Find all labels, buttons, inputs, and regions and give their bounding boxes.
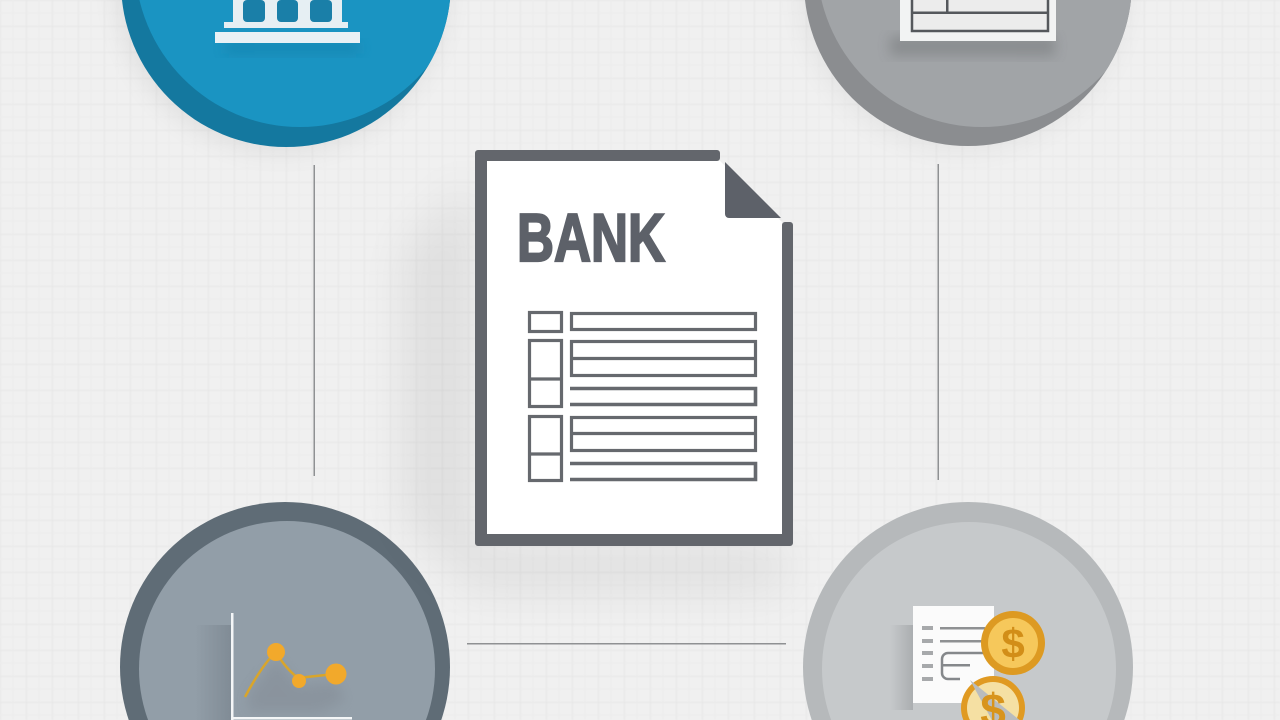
connector: left vertical line bbox=[314, 165, 315, 476]
coin: upper bbox=[981, 611, 1045, 675]
panel: bank statement document bbox=[405, 150, 793, 590]
icon: invoice with coins bbox=[890, 606, 1045, 720]
coin: lower bbox=[961, 676, 1025, 720]
connector: right vertical line bbox=[938, 164, 939, 480]
coin: upper: $ bbox=[1001, 620, 1025, 667]
table form bbox=[530, 312, 756, 480]
icon: line chart bbox=[211, 613, 352, 720]
document shadow bbox=[405, 175, 793, 590]
panel: blue bank circle bbox=[117, 0, 465, 151]
icon: form document bbox=[900, 0, 1056, 41]
icon: folded corner bbox=[725, 162, 781, 218]
connector: bottom horizontal line bbox=[467, 643, 786, 644]
icon: bank building bbox=[215, 0, 360, 43]
document sheet bbox=[475, 150, 793, 546]
panel: grey form circle bbox=[800, 0, 1147, 150]
panel: money circle bbox=[803, 502, 1133, 720]
receipt sheet bbox=[913, 606, 994, 703]
heading: BANK: BANK bbox=[517, 200, 665, 276]
panel: chart circle bbox=[120, 502, 450, 720]
